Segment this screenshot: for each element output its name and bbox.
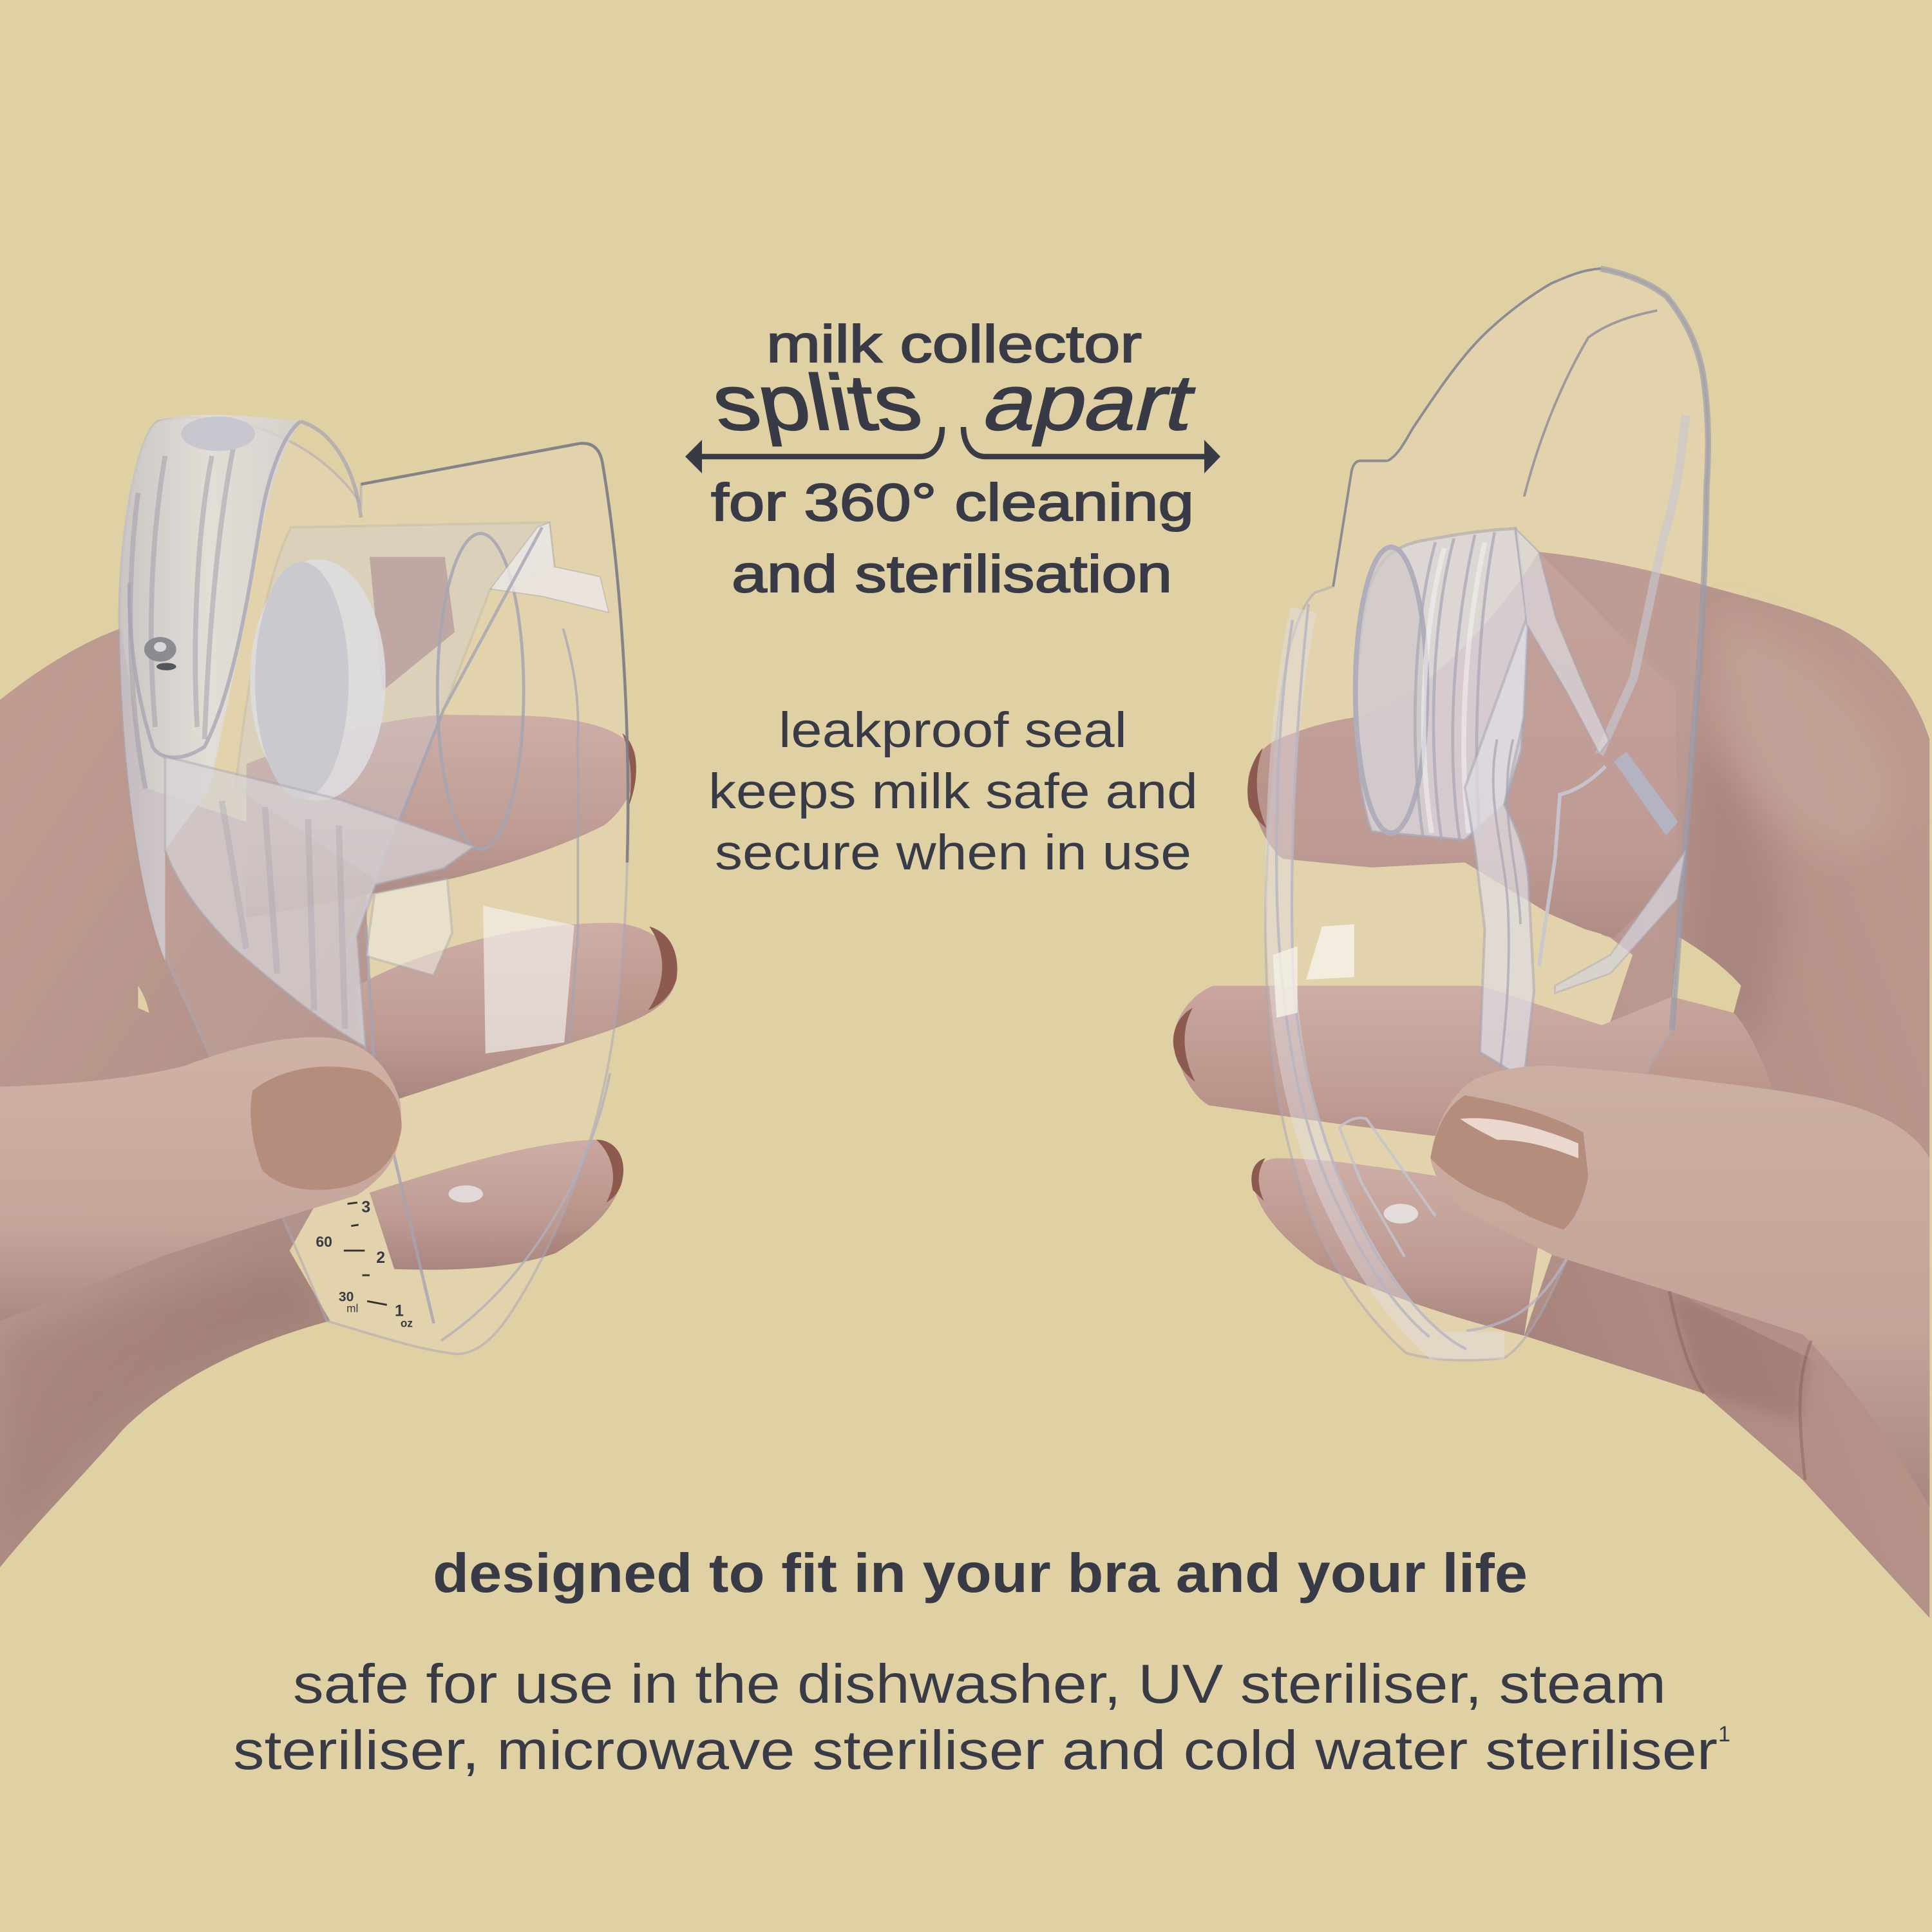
left diagonal strap edge [348, 527, 542, 1323]
left lower glass block [165, 757, 475, 1047]
right neck threads [1415, 533, 1495, 843]
right s-curve band [1465, 611, 1534, 1079]
right collector flange [1265, 269, 1708, 1360]
left middle finger [357, 923, 676, 1103]
left index finger [247, 715, 636, 918]
right threaded neck [1356, 529, 1528, 840]
infographic canvas [0, 265, 1929, 1776]
bottom text block: 1 [1718, 1722, 1730, 1747]
left valve button [181, 417, 255, 451]
left collector top edge [361, 443, 628, 862]
right under-thumb shadow [1669, 1291, 1812, 1422]
right band inner ridges [1493, 739, 1520, 1066]
left membrane outer ring [250, 560, 386, 801]
left ring nail [596, 1140, 623, 1202]
right bottom curve [1340, 1118, 1435, 1257]
left cap ring [129, 421, 301, 757]
right dimple [1384, 1204, 1418, 1224]
right diagonal strap [1515, 529, 1609, 754]
left refracted finger behind spout [370, 557, 455, 691]
right collector upper edge [1333, 269, 1600, 587]
photo: right hand holding collector half [1173, 269, 1929, 1618]
left index nail [622, 733, 636, 807]
bottom text block: safe for use in the dishwasher, UV steriliser, steam [293, 1654, 1666, 1715]
measurement markings: oz [401, 1317, 413, 1330]
right ring finger [1253, 1158, 1540, 1336]
right nail gloss [1460, 1118, 1578, 1158]
right lower strap [1555, 850, 1685, 993]
left inner flange line [563, 629, 578, 1043]
left spout opening [437, 533, 524, 849]
text block: leakproof seal: keeps milk safe and [708, 764, 1198, 819]
right middle finger [1174, 986, 1774, 1183]
right palm crease [1669, 1291, 1812, 1480]
left membrane [255, 562, 348, 799]
right neck opening [1356, 547, 1427, 833]
small background gap in left palm [138, 986, 149, 1013]
arrow: right [963, 427, 1220, 473]
measurement markings: 1 [395, 1302, 404, 1320]
measurement markings: ml [346, 1302, 358, 1315]
right collector inner rim [1599, 415, 1685, 754]
left thumb nail [251, 1066, 402, 1190]
text block: leakproof seal: leakproof seal [779, 703, 1127, 758]
right white reflection patch small [1273, 946, 1298, 1018]
right inner contour [1539, 766, 1605, 966]
left triangular fin [366, 878, 452, 976]
right collector thick rim [1600, 269, 1708, 1030]
right index nail [1247, 748, 1267, 828]
measurement markings: 2 [376, 1249, 385, 1267]
left palm shading [9, 1287, 286, 1502]
left collector silvery body [120, 415, 301, 961]
left middle nail [648, 927, 677, 1010]
left dimple [448, 1186, 483, 1202]
right thumb [1430, 1066, 1929, 1507]
measurement markings: 30 [339, 1289, 354, 1304]
right left ridged band [1276, 604, 1569, 1349]
left lavender flap [490, 522, 609, 612]
left metal bead [144, 637, 176, 670]
left ring finger [370, 1140, 623, 1270]
bottom text block: steriliser, microwave steriliser and cold water steriliser [233, 1720, 1718, 1781]
left spout box [235, 522, 554, 881]
right middle nail [1173, 1008, 1195, 1082]
heading: apart: apart [976, 359, 1204, 447]
right web shadow [1688, 727, 1786, 1047]
arrow: left [685, 427, 942, 473]
background seen through collector [1540, 914, 1633, 1029]
right index finger [1248, 552, 1677, 938]
right thumb nail [1430, 1095, 1588, 1229]
left collector flange [120, 418, 628, 1354]
right ring nail [1251, 1158, 1265, 1201]
right hand upper highlight [1717, 616, 1897, 853]
left glass block streaks [222, 801, 345, 1029]
left lower inner curve [441, 1073, 610, 1341]
text: and sterilisation: and sterilisation [732, 545, 1172, 603]
heading: splits: splits [705, 359, 928, 447]
measurement markings: 60 [316, 1233, 332, 1250]
text: for 360 cleaning: for 360° cleaning [711, 473, 1194, 532]
bottom text block [233, 1654, 1730, 1781]
heading: milk collector: milk collector [766, 315, 1142, 374]
photo: left hand holding collector half [0, 415, 677, 1567]
left hand palm [0, 629, 370, 1567]
right hand palm [1524, 552, 1929, 1618]
right lavender strip [1614, 752, 1678, 835]
left white reflection patch [483, 905, 574, 1054]
left thumb [0, 1037, 401, 1321]
text block: leakproof seal [708, 703, 1198, 880]
measurement markings [316, 1198, 413, 1330]
background wedge between fingers [1672, 936, 1741, 1013]
right white reflection patch large [1306, 924, 1354, 980]
left body streaks [131, 444, 234, 788]
text block: leakproof seal: secure when in use [715, 825, 1191, 880]
right neck thread highlights [1424, 542, 1484, 833]
left disc face rim [301, 421, 361, 518]
measurement markings: 3 [361, 1198, 370, 1217]
right inner arc [1524, 310, 1657, 497]
bottom heading: designed to fit in your bra and your life [433, 1543, 1528, 1604]
